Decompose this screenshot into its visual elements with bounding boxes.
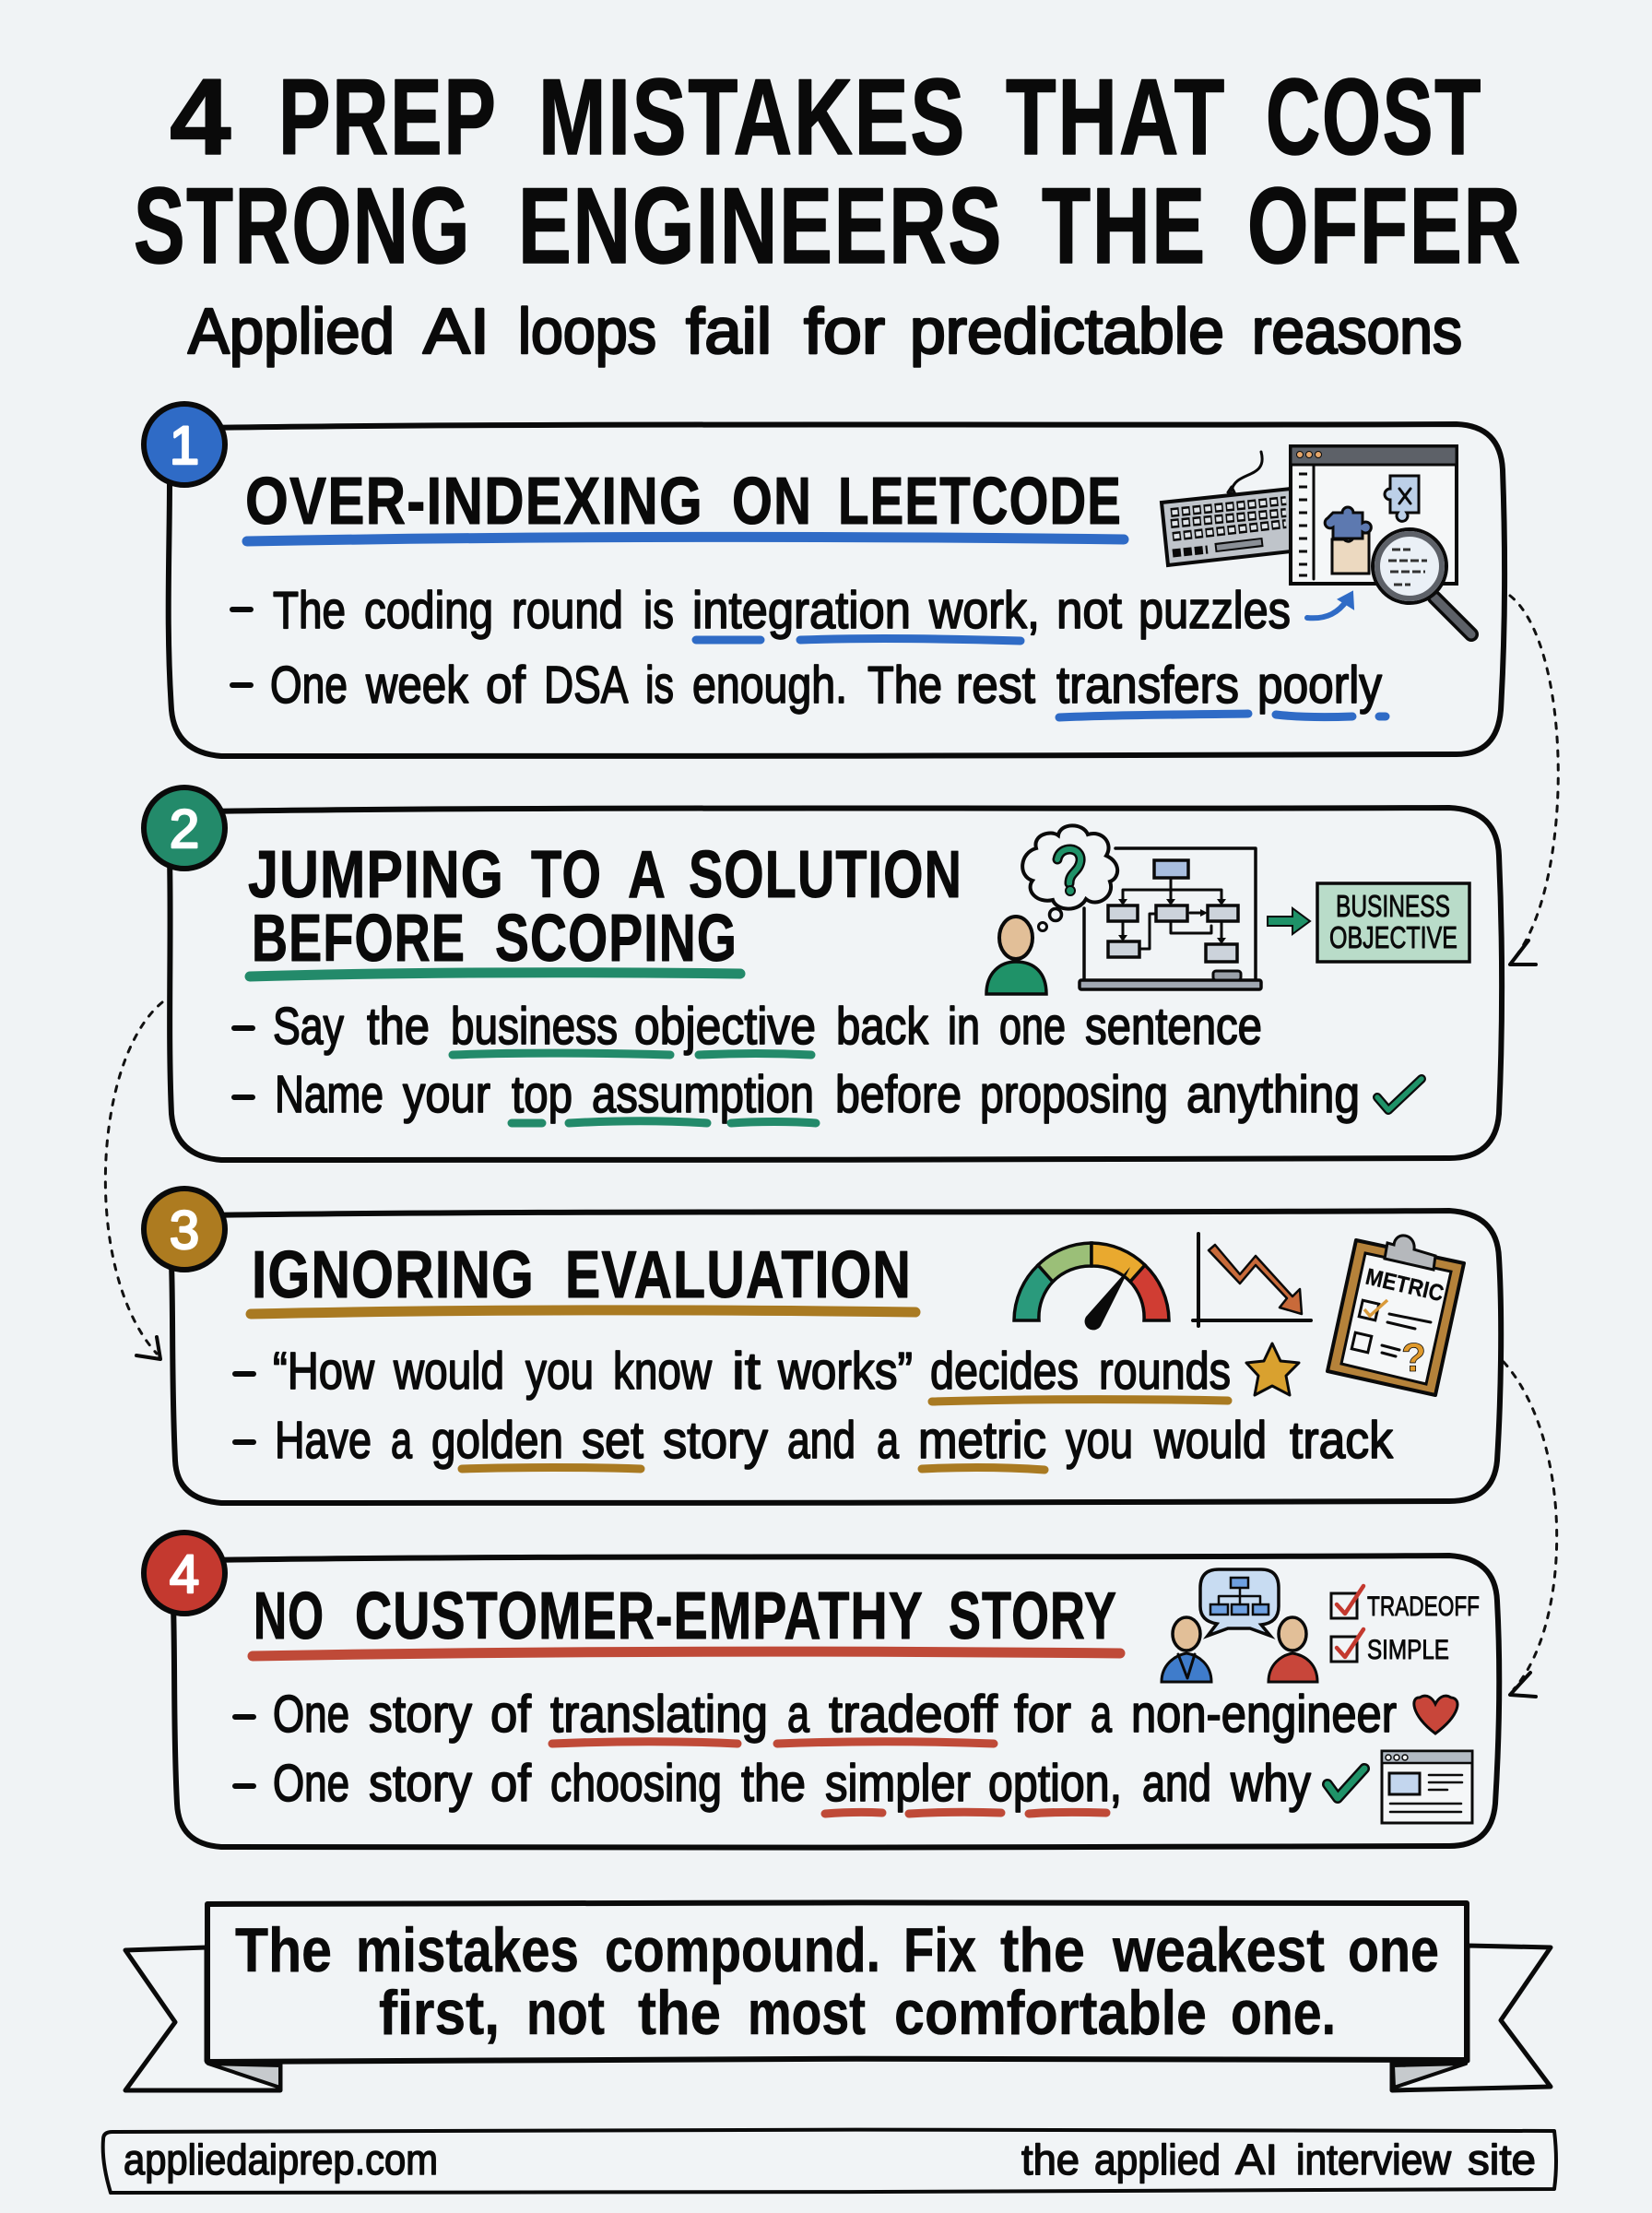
bullets 4: a <box>787 1685 809 1744</box>
subtitle: loops <box>518 295 656 367</box>
bullets 1: not <box>1056 581 1122 640</box>
title: OFFER <box>1247 165 1522 286</box>
bullets 2: assumption <box>592 1065 814 1124</box>
connector arrow: card 2 to card 3 <box>105 1002 162 1359</box>
bullets 3: and <box>787 1411 856 1470</box>
bullets 4: story <box>369 1685 472 1744</box>
banner text: first, <box>379 1978 500 2048</box>
panel: mistake 4 <box>144 1533 1499 1848</box>
heading 4: NO <box>254 1580 324 1653</box>
bullets 3: would <box>1153 1411 1267 1470</box>
bullets 3 <box>235 1342 1393 1470</box>
bullets 4: of <box>490 1754 531 1813</box>
bullets 4 <box>235 1685 1397 1814</box>
title: STRONG <box>134 165 471 286</box>
bullets 1: One <box>270 656 348 715</box>
footer tagline: the <box>1021 2136 1080 2183</box>
bullets 4: translating <box>550 1685 768 1744</box>
bullets 3: a <box>391 1411 412 1470</box>
icon: metric clipboard <box>1328 1236 1464 1395</box>
bullets 4: story <box>369 1754 472 1813</box>
person right <box>1268 1617 1317 1682</box>
left ribbon tail <box>125 1947 280 2090</box>
icon: green check 4 <box>1328 1769 1364 1798</box>
bullets 3: rounds <box>1099 1342 1231 1401</box>
footer tagline: interview <box>1296 2136 1452 2183</box>
card outline 4 <box>173 1556 1499 1848</box>
number badge 2 <box>144 787 225 869</box>
bullets 1 <box>232 581 1386 717</box>
bullets 3: it <box>732 1342 761 1401</box>
icon: metric clipboard: ? <box>1401 1335 1426 1380</box>
subtitle: predictable <box>910 295 1224 367</box>
magnifier <box>1373 529 1471 634</box>
bullets 1: coding <box>364 581 493 640</box>
bullets 2: before <box>835 1065 962 1124</box>
bullets 4: choosing <box>550 1754 722 1813</box>
bullets 1: week <box>365 656 468 715</box>
bullets 1: integration <box>692 581 911 640</box>
subtitle: fail <box>686 295 772 367</box>
panel: mistake 1 <box>144 404 1504 756</box>
bullets 1: work, <box>928 581 1040 640</box>
banner face <box>207 1902 1467 2062</box>
banner text: mistakes <box>356 1915 579 1985</box>
bullets 4: simpler <box>825 1754 971 1813</box>
heading 3: IGNORING <box>252 1238 535 1312</box>
bullets 2: anything <box>1186 1065 1360 1124</box>
banner callout <box>125 1902 1551 2090</box>
heading 3: EVALUATION <box>565 1238 912 1312</box>
heading underline 4 <box>253 1651 1120 1656</box>
card outline 2 <box>170 808 1502 1160</box>
heading underline 1 <box>247 537 1124 541</box>
bullets 1: of <box>486 656 525 715</box>
bullets 1: is <box>643 581 674 640</box>
bullets 1: round <box>512 581 623 640</box>
title: THE <box>1042 165 1207 286</box>
banner text: the <box>1000 1915 1085 1985</box>
banner text <box>235 1915 1439 2048</box>
banner text: the <box>638 1978 721 2048</box>
bullets 3: you <box>525 1342 594 1401</box>
checklist: tradeoff and simple: TRADEOFF <box>1367 1592 1480 1622</box>
banner text: weakest <box>1112 1915 1325 1985</box>
subtitle: AI <box>423 295 490 367</box>
footer tagline: applied <box>1094 2136 1221 2183</box>
puzzle pieces <box>1325 476 1419 574</box>
bullets 2: Name <box>275 1065 384 1124</box>
title: MISTAKES <box>538 56 966 177</box>
title: ENGINEERS <box>518 165 1003 286</box>
bullets 1: enough. <box>692 656 847 715</box>
icon: small arrow <box>1307 592 1353 618</box>
icon: heart <box>1414 1696 1457 1734</box>
bullets 3: decides <box>930 1342 1079 1401</box>
speech bubble <box>1200 1569 1279 1636</box>
bullets 1: poorly <box>1257 656 1382 715</box>
icon: simple window <box>1382 1751 1472 1823</box>
heading 1: ON <box>732 465 812 538</box>
heading 4: CUSTOMER-EMPATHY <box>355 1580 923 1653</box>
title: 4 <box>170 56 233 177</box>
heading 1: OVER-INDEXING <box>245 465 703 538</box>
heading 2 <box>248 838 962 976</box>
person left <box>1162 1617 1211 1682</box>
window <box>1291 446 1457 584</box>
box: business objective: OBJECTIVE <box>1329 920 1457 954</box>
icon: gauge <box>1014 1243 1169 1330</box>
bullets 3: metric <box>918 1411 1046 1470</box>
connector arrow: card 3 to card 4 <box>1504 1362 1557 1697</box>
heading underline 2 <box>250 973 740 976</box>
icon: star <box>1246 1343 1299 1395</box>
title: THAT <box>1006 56 1226 177</box>
keyboard <box>1162 452 1291 565</box>
heading 2: BEFORE <box>252 902 466 976</box>
bullets 4: for <box>1014 1685 1071 1744</box>
checklist: tradeoff and simple: SIMPLE <box>1367 1635 1449 1665</box>
footer bar <box>103 2130 1556 2193</box>
number badge 3 <box>144 1189 225 1270</box>
title: PREP <box>278 56 496 177</box>
number badge 4: 4 <box>170 1544 199 1604</box>
box: business objective: BUSINESS <box>1336 889 1450 923</box>
icon: two people and speech bubble <box>1162 1569 1317 1682</box>
bullets 2 <box>234 997 1360 1124</box>
bullets 3: a <box>877 1411 899 1470</box>
bullets 2: one <box>999 997 1066 1056</box>
bullets 2: top <box>512 1065 572 1124</box>
bullets 3: would <box>393 1342 504 1401</box>
bullets 2: in <box>948 997 980 1056</box>
bullets 2: sentence <box>1085 997 1262 1056</box>
left fold <box>208 2064 280 2088</box>
bullets 4: of <box>490 1685 531 1744</box>
whiteboard <box>1080 848 1261 989</box>
bullets 4: the <box>741 1754 806 1813</box>
footer tagline: site <box>1468 2136 1536 2183</box>
heading 2: SCOPING <box>495 902 738 976</box>
bullets 3: works” <box>777 1342 913 1401</box>
bullets 3: story <box>663 1411 768 1470</box>
box: business objective <box>1317 883 1469 962</box>
subtitle: for <box>804 295 885 367</box>
bullets 1: The <box>273 581 346 640</box>
bullets 3: “How <box>273 1342 375 1401</box>
bullets 4: why <box>1230 1754 1311 1813</box>
heading 1: LEETCODE <box>838 465 1122 538</box>
heading 2: JUMPING <box>248 838 504 912</box>
bullets 1: DSA <box>544 656 628 715</box>
banner text: most <box>748 1978 866 2048</box>
heading 2: TO <box>531 838 602 912</box>
panel: mistake 3 <box>144 1189 1501 1503</box>
banner text: not <box>526 1978 605 2048</box>
icon: metric clipboard: METRIC <box>1363 1264 1446 1307</box>
banner text: one <box>1348 1915 1439 1985</box>
bullets 4: tradeoff <box>829 1685 997 1744</box>
bullets 2: back <box>836 997 928 1056</box>
bullets 2: the <box>367 997 430 1056</box>
number badge 2: 2 <box>170 799 199 859</box>
bullets 1: is <box>645 656 674 715</box>
heading underline 3 <box>251 1310 915 1314</box>
banner text: Fix <box>903 1915 976 1985</box>
bullets 2: objective <box>634 997 816 1056</box>
banner text: one. <box>1231 1978 1336 2048</box>
heading 2: SOLUTION <box>689 838 962 912</box>
bullets 1: puzzles <box>1139 581 1291 640</box>
bullets 2: your <box>403 1065 490 1124</box>
bullets 1: The <box>867 656 942 715</box>
person <box>986 917 1046 994</box>
banner text: comfortable <box>894 1978 1207 2048</box>
checklist: tradeoff and simple <box>1331 1586 1480 1665</box>
subtitle: reasons <box>1252 295 1462 367</box>
bullets 4: One <box>273 1754 349 1813</box>
bullets 2: business <box>451 997 618 1056</box>
heading 2: A <box>628 838 665 912</box>
number badge 1 <box>144 404 225 485</box>
bullets 3: set <box>582 1411 643 1470</box>
number badge 1: 1 <box>170 416 199 476</box>
card outline 3 <box>171 1211 1501 1503</box>
bullets 4: a <box>1091 1685 1112 1744</box>
bullets 1: transfers <box>1056 656 1239 715</box>
panel: mistake 2 <box>144 787 1502 1160</box>
title: COST <box>1266 56 1482 177</box>
bullets 3: golden <box>431 1411 563 1470</box>
bullets 2: Say <box>273 997 344 1056</box>
card outline 1 <box>169 424 1504 756</box>
arrow to business objective <box>1268 908 1310 934</box>
bullets 3: track <box>1290 1411 1393 1470</box>
icon: keyboard, code window and magnifier <box>1162 446 1471 634</box>
thought cloud <box>1022 825 1117 931</box>
bullets 4: and <box>1142 1754 1211 1813</box>
bullets 2: proposing <box>980 1065 1168 1124</box>
number badge 3: 3 <box>170 1201 199 1260</box>
bullets 4: One <box>273 1685 349 1744</box>
footer tagline: AI <box>1235 2136 1278 2183</box>
bullets 3: Have <box>275 1411 372 1470</box>
bullets 4: non-engineer <box>1131 1685 1397 1744</box>
right ribbon tail <box>1392 1946 1551 2090</box>
icon: falling chart <box>1193 1234 1311 1326</box>
number badge 4 <box>144 1533 225 1614</box>
right fold <box>1393 2064 1466 2088</box>
icon: green check 2 <box>1377 1079 1422 1110</box>
heading 4: STORY <box>949 1580 1117 1653</box>
footer site name: appliedaiprep.com <box>124 2136 438 2183</box>
title <box>134 56 1522 286</box>
subtitle: Applied <box>188 295 395 367</box>
banner text: The <box>235 1915 332 1985</box>
bullets 1: rest <box>956 656 1035 715</box>
banner text: compound. <box>605 1915 880 1985</box>
connector arrow: card 1 to card 2 <box>1510 596 1558 964</box>
bullets 3: know <box>613 1342 713 1401</box>
icon: thinker and whiteboard <box>986 825 1261 994</box>
bullets 3: you <box>1066 1411 1133 1470</box>
bullets 4: option, <box>988 1754 1122 1813</box>
